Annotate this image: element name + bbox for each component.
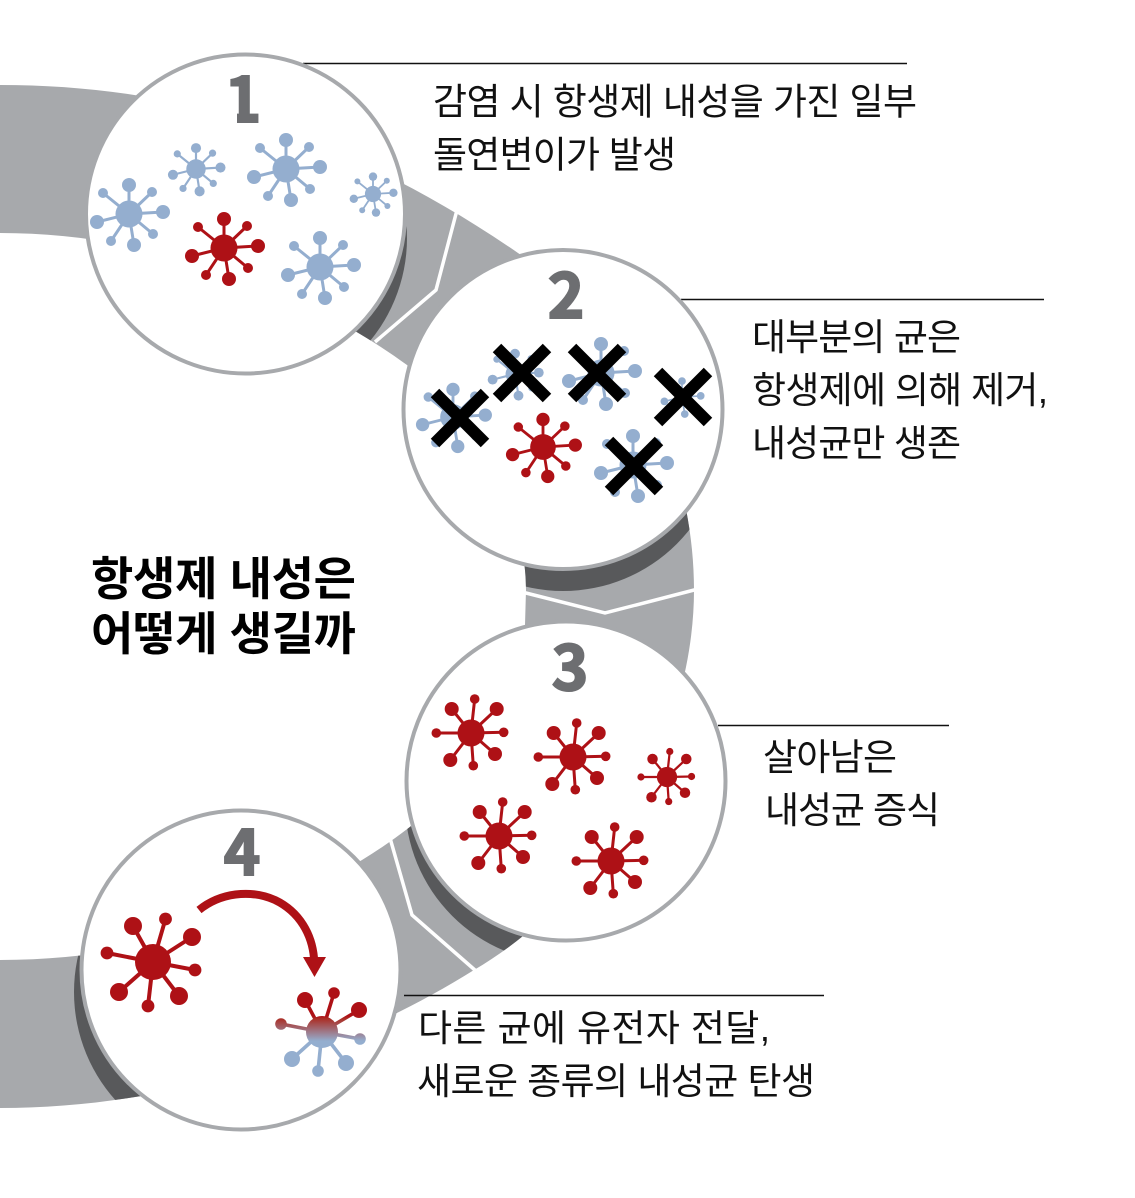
cycle band xyxy=(0,76,727,1154)
text: step 2: 내성균만 생존 xyxy=(752,423,961,464)
number 3: 3 xyxy=(552,618,588,708)
icon: blue germ xyxy=(488,349,544,401)
text: step 3 xyxy=(763,737,940,831)
icon: red germ xyxy=(432,694,508,770)
panel: step 3 circle xyxy=(406,618,726,940)
rule: step 3 xyxy=(718,724,949,726)
text: step 2: 항생제에 의해 제거, xyxy=(752,370,1048,411)
icon: blue germ xyxy=(90,178,170,252)
number 2: 2 xyxy=(548,246,584,336)
rule: step 4 xyxy=(404,994,824,996)
icon: black crosses xyxy=(435,348,708,491)
heading: 어떻게 생길까 xyxy=(91,608,356,660)
icon: small blue germ xyxy=(350,172,398,217)
icon: blue germ xyxy=(562,337,642,411)
icon: red germ xyxy=(460,797,536,874)
text: step 2 xyxy=(752,317,1048,464)
icon: blue germ xyxy=(594,429,674,503)
number 4: 4 xyxy=(224,803,260,893)
icon: small red germ xyxy=(637,748,695,805)
icon: recipient mixed germ xyxy=(275,987,367,1077)
icon: blue germ xyxy=(661,377,705,418)
icon: red germ xyxy=(572,822,648,898)
text: step 1: 감염 시 항생제 내성을 가진 일부 xyxy=(433,82,917,122)
icon: blue germ xyxy=(416,383,492,453)
text: step 3: 살아남은 xyxy=(763,737,897,778)
arrow: gene transfer xyxy=(199,894,326,977)
text: step 4: 새로운 종류의 내성균 탄생 xyxy=(417,1061,815,1102)
heading xyxy=(91,553,356,660)
text: step 2: 대부분의 균은 xyxy=(752,317,961,358)
icon: resistant red germ xyxy=(185,212,265,286)
text: step 1 xyxy=(433,82,917,176)
number 1: 1 xyxy=(225,50,261,140)
icon: red germ xyxy=(534,718,610,794)
text: step 4 xyxy=(417,1008,815,1102)
text: step 4: 다른 균에 유전자 전달, xyxy=(418,1008,770,1049)
icon: donor red germ xyxy=(101,913,201,1012)
panel: step 2 circle xyxy=(404,246,722,569)
panel: step 4 circle xyxy=(82,803,400,1130)
text: step 3: 내성균 증식 xyxy=(765,790,940,831)
icon: small blue germ xyxy=(168,143,226,196)
rule: step 2 xyxy=(681,298,1044,300)
text: step 1: 돌연변이가 발생 xyxy=(433,134,676,176)
panel: step 1 circle xyxy=(86,50,405,374)
rule: step 1 xyxy=(303,62,907,64)
icon: blue germ xyxy=(281,231,361,305)
icon: surviving red germ xyxy=(506,413,582,483)
heading: 항생제 내성은 xyxy=(91,553,356,605)
icon: blue germ xyxy=(247,133,327,207)
